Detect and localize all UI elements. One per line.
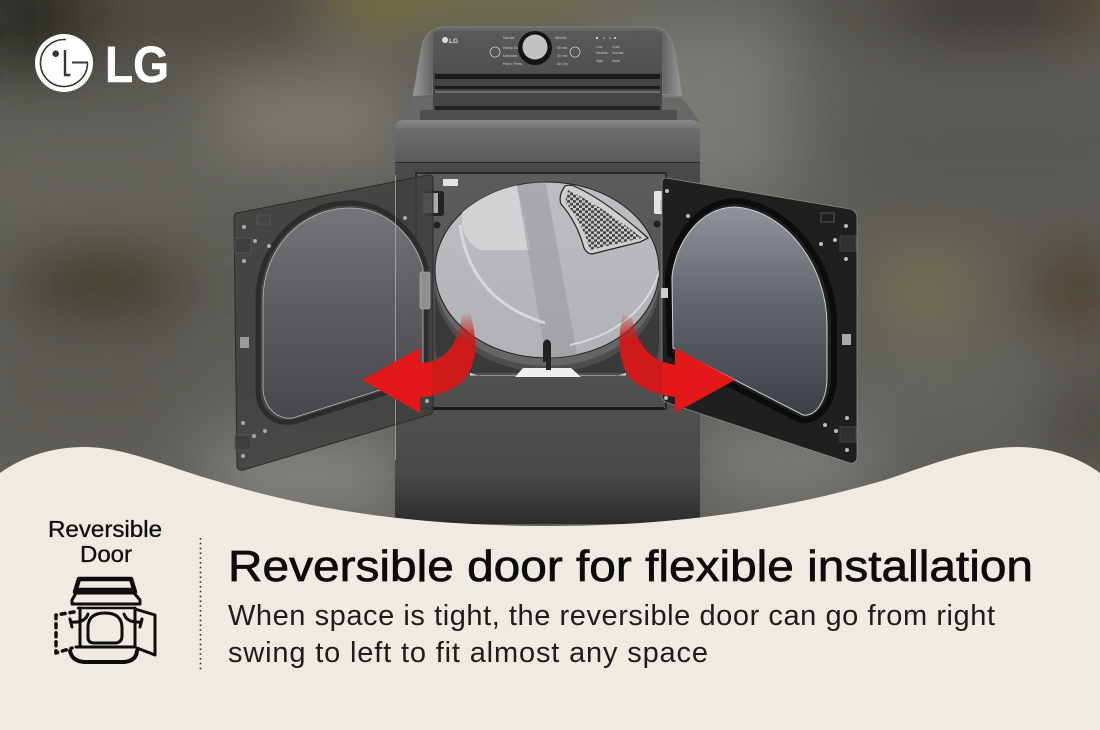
dial knob [518,31,552,65]
control panel: High [596,59,603,63]
cream wave panel [0,447,1100,730]
right door [661,178,857,463]
description: swing to left to fit almost any space [228,637,708,669]
control panel: 60 min [557,46,568,50]
LG logo [35,34,169,93]
drum [435,180,660,377]
right red arrow [620,315,735,413]
left door [234,175,433,470]
icon label: Reversible [48,516,162,542]
control panel: 30 min [557,54,568,58]
control panel [413,27,682,96]
icon: reversible door dryer [56,579,155,662]
door opening frame [416,173,666,409]
control panel: Less [612,45,620,49]
dotted divider [200,538,202,672]
control panel: LG [449,38,458,45]
control panel: Low [596,45,603,49]
control panel: Normal [503,36,515,40]
label and hinges [423,179,671,228]
dryer [395,27,700,524]
control panel: More [612,59,620,63]
louvers [433,73,662,110]
drum base [470,373,626,376]
description [228,600,995,669]
control panel: Delicates [503,54,518,58]
lower body [395,408,700,524]
LG logo: LG [105,36,169,93]
description: When space is tight, the reversible door can go from right [228,600,995,632]
control panel: Heavy Duty [503,46,521,50]
control panel: Normal [612,51,624,55]
control panel: Perm. Press [503,62,523,66]
control panel: Wrinkle [555,36,567,40]
control panel: Air Dry [557,62,568,66]
left red arrow [362,313,475,413]
icon label: Door [80,541,132,567]
top deck [395,120,700,162]
icon label [48,516,162,567]
lint filter [560,185,648,254]
heading: Reversible door for flexible installation [228,542,1033,591]
control panel: Medium [596,51,609,55]
